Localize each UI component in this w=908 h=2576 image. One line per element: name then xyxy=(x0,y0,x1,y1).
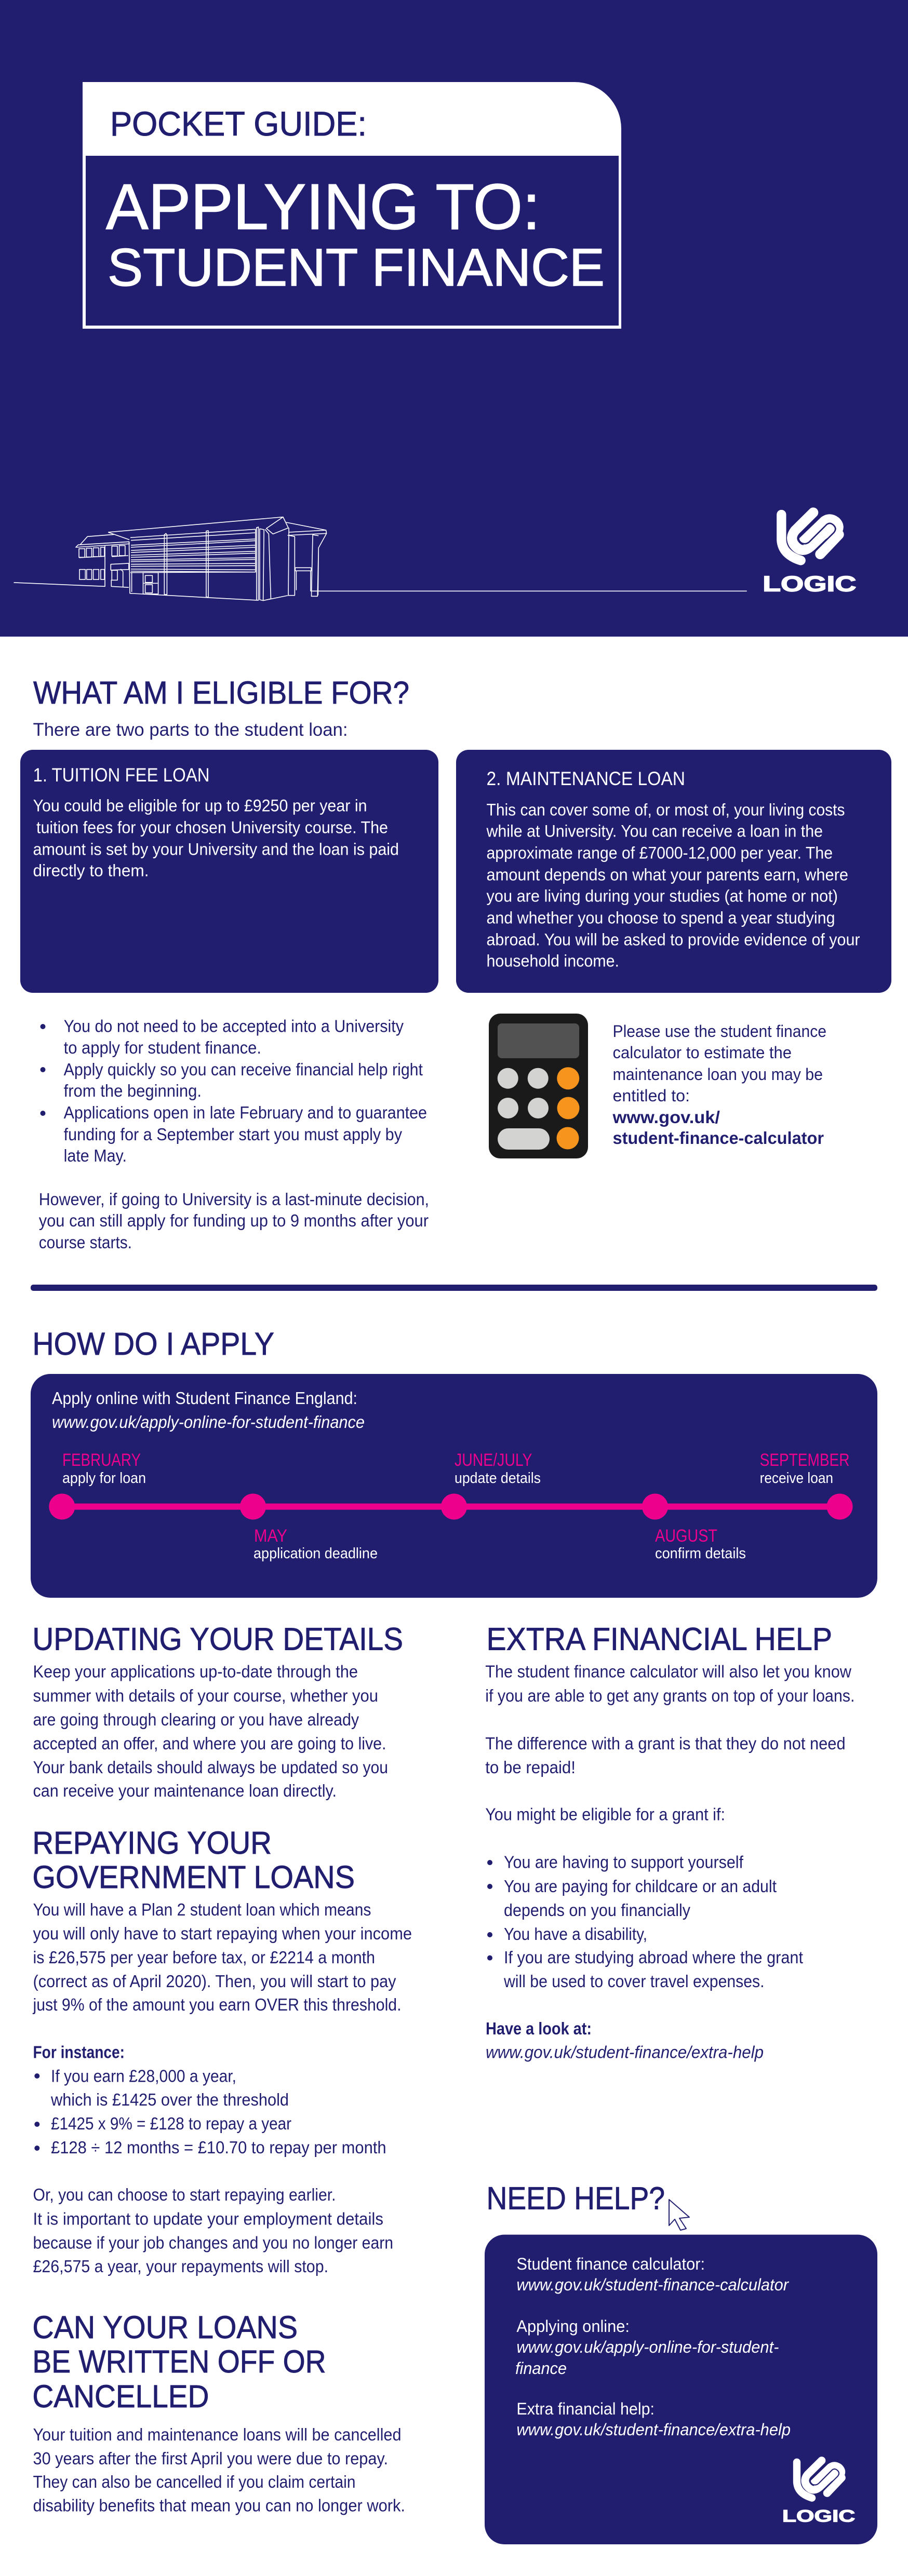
timeline line and dots xyxy=(49,1493,852,1519)
bullet list: eligibility notes: Apply quickly so you can receive financial help right xyxy=(64,1060,423,1079)
section: repaying your government loans: You will have a Plan 2 student loan which means xyxy=(33,1900,371,1919)
panel: maintenance loan: you are living during your studies (at home or not) xyxy=(486,887,838,906)
panel: need help links xyxy=(485,2235,877,2544)
section: can your loans be written off: disability benefits that mean you can no longer work. xyxy=(33,2496,405,2515)
section: can your loans be written off: BE WRITTEN OFF OR xyxy=(32,2344,326,2379)
section: repaying your government loans xyxy=(32,1825,412,2276)
section: extra financial help: You might be eligible for a grant if: xyxy=(485,1805,725,1824)
section: updating your details xyxy=(32,1621,403,1800)
panel: application timeline: update details xyxy=(455,1470,541,1487)
panel: application timeline xyxy=(31,1374,877,1598)
panel: application timeline: MAY xyxy=(254,1526,287,1546)
bullet list: eligibility notes xyxy=(41,1016,427,1165)
panel: tuition fee loan xyxy=(20,750,438,993)
panel: tuition fee loan: 1. TUITION FEE LOAN xyxy=(33,764,210,786)
text: calculator note: www.gov.uk/ xyxy=(612,1108,720,1127)
title: student finance: STUDENT FINANCE xyxy=(108,238,605,297)
section: can your loans be written off: They can also be cancelled if you claim certain xyxy=(33,2472,355,2491)
section: extra financial help: You are paying for childcare or an adult xyxy=(504,1877,777,1896)
panel: application timeline: confirm details xyxy=(655,1545,746,1562)
heading: how do I apply: HOW DO I APPLY xyxy=(32,1326,274,1361)
panel: application timeline: JUNE/JULY xyxy=(455,1450,532,1470)
icon: college building line drawing xyxy=(14,517,747,601)
section: can your loans be written off: CANCELLED xyxy=(32,2379,209,2414)
section: extra financial help: The difference with a grant is that they do not need xyxy=(485,1734,846,1753)
logo: Logic small xyxy=(782,2461,855,2526)
bullet list: eligibility notes: Applications open in late February and to guarantee xyxy=(64,1103,427,1122)
section: updating your details: Keep your applications up-to-date through the xyxy=(33,1662,358,1681)
section: repaying your government loans: It is important to update your employment details xyxy=(33,2209,383,2229)
section: updating your details: summer with details of your course, whether you xyxy=(33,1686,378,1705)
logo: Logic: LOGIC xyxy=(763,571,856,596)
section: extra financial help: The student finance calculator will also let you know xyxy=(485,1662,851,1681)
panel: application timeline: application deadline xyxy=(253,1545,378,1562)
text: last-minute decision note xyxy=(39,1190,429,1252)
text: calculator note: maintenance loan you may be xyxy=(613,1065,823,1084)
panel: header banner xyxy=(0,0,908,637)
title box xyxy=(83,82,621,329)
section: updating your details: Your bank details should always be updated so you xyxy=(33,1758,388,1777)
text: calculator note: Please use the student finance xyxy=(613,1022,826,1041)
section: extra financial help: Have a look at: xyxy=(486,2019,592,2038)
bullet list: eligibility notes: You do not need to be accepted into a University xyxy=(64,1016,404,1035)
section: repaying your government loans: just 9% of the amount you earn OVER this threshold. xyxy=(33,1995,401,2014)
section: repaying your government loans: because if your job changes and you no longer earn xyxy=(33,2233,393,2253)
section: extra financial help: if you are able to get any grants on top of your loans. xyxy=(485,1686,855,1705)
section: extra financial help: If you are studying abroad where the grant xyxy=(504,1948,803,1967)
panel: tuition fee loan: directly to them. xyxy=(33,861,149,880)
text: calculator note: student-finance-calculator xyxy=(613,1128,824,1148)
panel: need help links: www.gov.uk/apply-online-for-student- xyxy=(516,2338,779,2356)
title: pocket guide: POCKET GUIDE: xyxy=(110,104,367,143)
bullet list: eligibility notes: to apply for student finance. xyxy=(64,1038,261,1057)
panel: application timeline: SEPTEMBER xyxy=(760,1450,850,1470)
section: repaying your government loans: REPAYING YOUR xyxy=(32,1825,272,1860)
panel: need help links: Student finance calculator: xyxy=(516,2255,705,2273)
section: repaying your government loans: which is £1425 over the threshold xyxy=(50,2090,289,2109)
panel: maintenance loan: approximate range of £7000-12,000 per year. The xyxy=(486,844,833,862)
section: extra financial help: You are having to support yourself xyxy=(504,1852,744,1871)
section: updating your details: are going through clearing or you have already xyxy=(33,1710,359,1729)
logo: Logic xyxy=(763,512,856,596)
panel: maintenance loan: abroad. You will be asked to provide evidence of your xyxy=(486,930,860,949)
text: last-minute decision note: course starts. xyxy=(39,1233,132,1252)
section: extra financial help xyxy=(485,1621,855,2062)
section: repaying your government loans: (correct as of April 2020). Then, you will start to pay xyxy=(33,1972,396,1991)
bullet list: eligibility notes: late May. xyxy=(64,1146,127,1165)
heading: what am I eligible for: WHAT AM I ELIGIBLE FOR? xyxy=(33,675,409,710)
panel: application timeline: apply for loan xyxy=(62,1470,146,1487)
section: extra financial help: depends on you financially xyxy=(504,1900,690,1920)
section: extra financial help: to be repaid! xyxy=(485,1758,576,1777)
panel: application timeline: www.gov.uk/apply-online-for-student-finance xyxy=(52,1412,365,1432)
panel: application timeline: receive loan xyxy=(760,1470,833,1487)
panel: application timeline: FEBRUARY xyxy=(62,1450,141,1470)
section: extra financial help: EXTRA FINANCIAL HELP xyxy=(486,1621,832,1656)
text: last-minute decision note: you can still apply for funding up to 9 months after your xyxy=(39,1211,429,1230)
section: can your loans be written off: Your tuition and maintenance loans will be cancelled xyxy=(33,2425,401,2444)
icon: mouse cursor xyxy=(669,2200,689,2230)
section: repaying your government loans: If you earn £28,000 a year, xyxy=(51,2066,236,2085)
panel: maintenance loan xyxy=(456,750,891,993)
panel: maintenance loan: This can cover some of, or most of, your living costs xyxy=(486,801,845,819)
section: repaying your government loans: you will only have to start repaying when your income xyxy=(33,1924,412,1943)
panel: need help links: www.gov.uk/student-finance-calculator xyxy=(516,2275,789,2294)
logo: Logic small: LOGIC xyxy=(782,2507,855,2526)
title: applying to: APPLYING TO: xyxy=(106,171,540,243)
section: can your loans be written off xyxy=(32,2310,405,2515)
panel: application timeline: AUGUST xyxy=(655,1526,717,1546)
section: updating your details: UPDATING YOUR DETAILS xyxy=(32,1621,403,1656)
section: updating your details: can receive your maintenance loan directly. xyxy=(33,1781,337,1800)
section: repaying your government loans: £1425 x 9% = £128 to repay a year xyxy=(51,2114,291,2133)
panel: maintenance loan: while at University. You can receive a loan in the xyxy=(486,822,823,841)
icon: calculator xyxy=(489,1014,588,1158)
text: calculator note: entitled to: xyxy=(613,1086,690,1105)
section: repaying your government loans: £26,575 a year, your repayments will stop. xyxy=(33,2257,328,2276)
section: can your loans be written off: 30 years after the first April you were due to repay. xyxy=(33,2449,388,2468)
panel: application timeline: Apply online with Student Finance England: xyxy=(52,1388,357,1408)
heading: need help: NEED HELP? xyxy=(486,2181,665,2216)
panel: need help links: finance xyxy=(515,2359,567,2378)
section: extra financial help: www.gov.uk/student-finance/extra-help xyxy=(486,2043,764,2062)
panel: maintenance loan: household income. xyxy=(486,952,619,970)
panel: need help links: Applying online: xyxy=(516,2317,630,2336)
text: last-minute decision note: However, if going to University is a last-minute decision, xyxy=(39,1190,429,1209)
panel: tuition fee loan: You could be eligible for up to £9250 per year in xyxy=(33,797,367,815)
bullet list: eligibility notes: from the beginning. xyxy=(64,1081,202,1100)
section: repaying your government loans: is £26,575 per year before tax, or £2214 a month xyxy=(33,1948,375,1967)
section: extra financial help: will be used to cover travel expenses. xyxy=(503,1972,765,1991)
section: repaying your government loans: Or, you can choose to start repaying earlier. xyxy=(33,2185,336,2204)
section: repaying your government loans: GOVERNMENT LOANS xyxy=(32,1859,355,1895)
panel: maintenance loan: 2. MAINTENANCE LOAN xyxy=(486,768,685,789)
panel: need help links: www.gov.uk/student-finance/extra-help xyxy=(516,2420,791,2439)
bullet list: eligibility notes: funding for a September start you must apply by xyxy=(64,1125,402,1144)
panel: need help links: Extra financial help: xyxy=(516,2399,655,2418)
panel: maintenance loan: amount depends on what your parents earn, where xyxy=(486,865,848,884)
section: repaying your government loans: For instance: xyxy=(33,2043,125,2062)
section: extra financial help: You have a disability, xyxy=(504,1924,647,1944)
section: updating your details: accepted an offer, and where you are going to live. xyxy=(33,1734,386,1753)
section: can your loans be written off: CAN YOUR LOANS xyxy=(32,2310,298,2345)
section: repaying your government loans: £128 ÷ 12 months = £10.70 to repay per month xyxy=(51,2138,386,2157)
panel: maintenance loan: and whether you choose to spend a year studying xyxy=(486,909,835,927)
panel: tuition fee loan: tuition fees for your chosen University course. The xyxy=(36,818,388,837)
text: two parts intro: There are two parts to the student loan: xyxy=(33,720,348,740)
panel: tuition fee loan: amount is set by your University and the loan is paid xyxy=(33,840,399,859)
text: calculator note xyxy=(612,1022,826,1148)
text: calculator note: calculator to estimate the xyxy=(613,1043,792,1062)
